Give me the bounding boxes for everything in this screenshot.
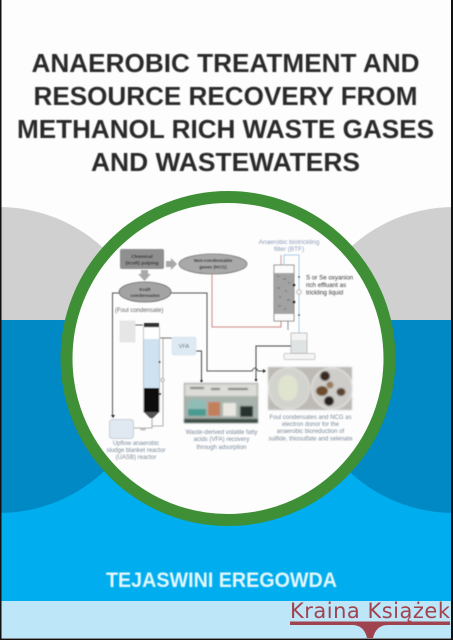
caption: VFA recovery: acids (VFA) recovery xyxy=(194,437,249,443)
caption: bioreduction: sulfide, thiosulfate and selenate xyxy=(268,436,353,442)
ellipse: kraft condensates xyxy=(119,282,171,302)
bottom pale blue strip xyxy=(0,601,453,638)
ellipse: non-condensable gases: Non-condensable xyxy=(194,258,233,263)
title xyxy=(17,48,434,177)
title: AND WASTEWATERS xyxy=(91,147,360,177)
box: VFA xyxy=(172,337,196,355)
arrow heads on loop xyxy=(111,369,266,418)
foul condensate loop line xyxy=(112,293,263,416)
box: chemical pulping: Chemical xyxy=(131,254,153,260)
caption: UASB reactor: sludge blanket reactor xyxy=(106,448,166,454)
label: trickling liquid: trickling liquid xyxy=(306,290,344,296)
label: trickling liquid xyxy=(306,274,354,296)
caption: bioreduction: Foul condensates and NCG as xyxy=(269,415,352,421)
box: chemical pulping xyxy=(120,249,164,269)
recirculation pipe xyxy=(133,338,164,430)
caption: UASB reactor: Upflow anaerobic xyxy=(113,441,159,447)
ellipse: non-condensable gases: gases (NCG) xyxy=(199,264,227,270)
arrow: pulping to NCG xyxy=(166,258,177,270)
caption: VFA recovery xyxy=(186,430,257,451)
box: VFA: VFA xyxy=(179,344,190,350)
arrow: column to VFA xyxy=(160,337,172,339)
line: flask to photo xyxy=(256,346,291,380)
title: METHANOL RICH WASTE GASES xyxy=(17,114,434,144)
watermark xyxy=(290,599,451,638)
title: ANAEROBIC TREATMENT AND xyxy=(32,48,420,78)
label: foul condensate: (Foul condensate) xyxy=(115,308,163,314)
label: trickling liquid: S or Se oxyanion xyxy=(306,274,354,282)
author: TEJASWINI EREGOWDA xyxy=(106,569,337,592)
arrow: pulping to condensates xyxy=(138,270,151,281)
biotrickling filter reactor xyxy=(274,255,302,335)
UASB column xyxy=(144,323,160,418)
caption: bioreduction: anaerobic bioreduction of xyxy=(277,429,345,435)
photo: petri dishes xyxy=(268,367,352,410)
process diagram xyxy=(106,239,354,461)
background: right gray and dark blue disc xyxy=(350,207,451,513)
flask on stirrer xyxy=(284,333,315,360)
photo: VFA adsorption jars xyxy=(184,383,258,423)
caption: UASB reactor xyxy=(106,441,166,461)
caption: VFA recovery: through adsorption xyxy=(196,445,247,451)
box: chemical pulping: (Kraft) pulping xyxy=(125,260,159,266)
caption: bioreduction xyxy=(268,415,353,442)
ellipse: kraft condensates: condensates xyxy=(130,293,160,299)
watermark: Kraina Książek xyxy=(290,599,451,623)
background: blue lower panel xyxy=(0,320,453,601)
label: biotrickling filter: Anaerobic biotrickling xyxy=(259,239,320,246)
caption: VFA recovery: Waste-derived volatile fatty xyxy=(186,430,257,436)
line: VFA to adsorption photo xyxy=(196,351,202,381)
label: trickling liquid: rich effluant as xyxy=(306,282,346,289)
red gas line xyxy=(212,274,281,327)
background: left gray and dark blue disc xyxy=(2,207,104,513)
label: biotrickling filter: filter (BTF) xyxy=(274,246,304,253)
title: RESOURCE RECOVERY FROM xyxy=(34,81,417,111)
arrow: feed to column xyxy=(135,324,143,326)
box: UASB tank xyxy=(110,420,134,438)
label: biotrickling filter xyxy=(259,239,320,253)
caption: bioreduction: electron donor for the xyxy=(282,422,340,428)
ellipse: non-condensable gases xyxy=(179,254,247,274)
caption: UASB reactor: (UASB) reactor xyxy=(116,455,156,461)
ellipse: kraft condensates: Kraft xyxy=(139,287,151,293)
green ring with white disc xyxy=(66,197,390,520)
feed tank xyxy=(120,321,135,342)
